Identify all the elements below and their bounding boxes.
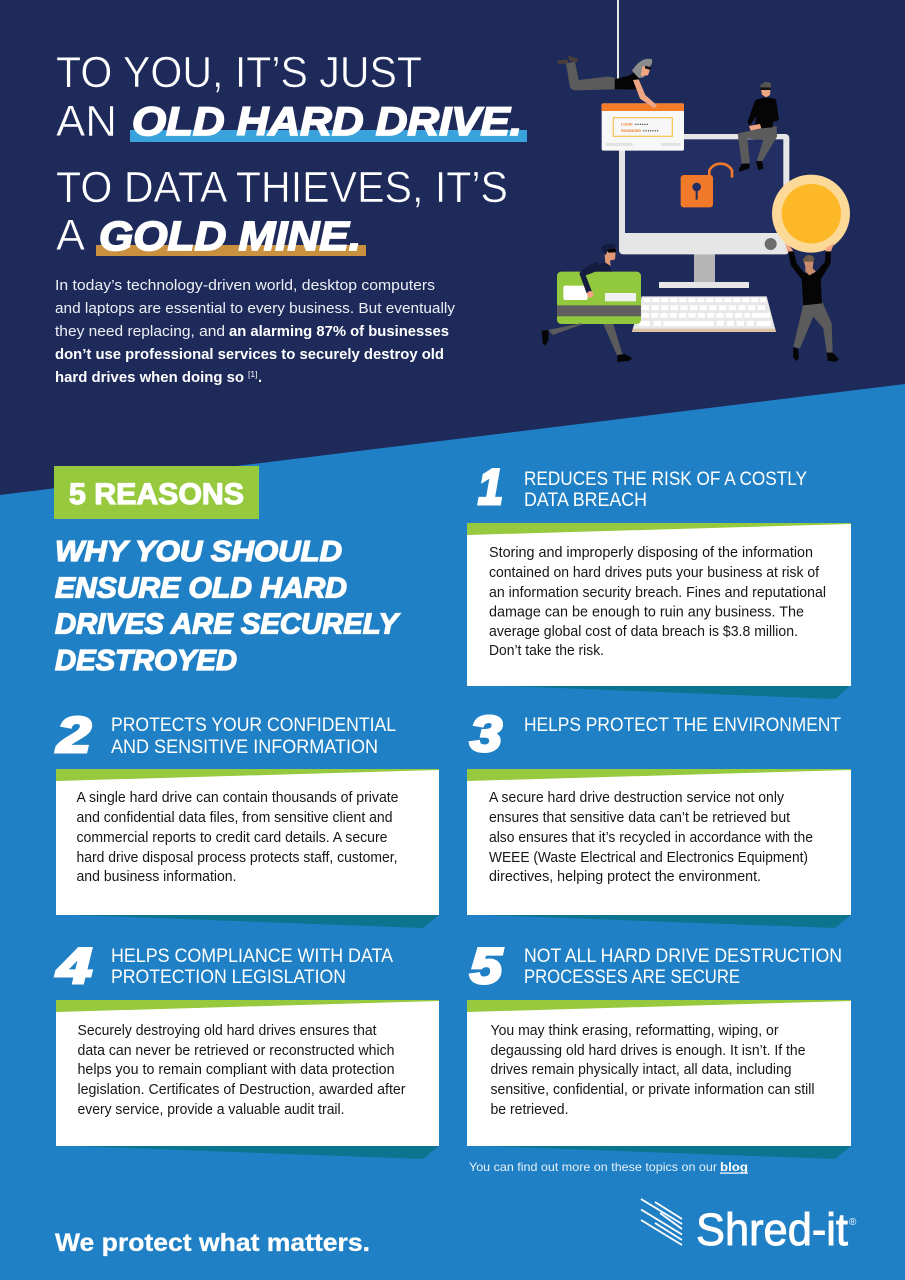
logo: Shred-it	[641, 1199, 857, 1255]
panel: reason 1: damage can be enough to ruin any business. The	[489, 604, 804, 620]
thief lifting coin	[785, 243, 839, 362]
panel: reason 1: average global cost of data breach is $3.8 million.	[489, 624, 798, 640]
badge: 5 reasons	[54, 466, 259, 519]
panel: reason 1: an information security breach. Fines and reputational	[489, 585, 826, 601]
intro paragraph: they need replacing, and	[55, 324, 225, 340]
gold coin	[772, 175, 850, 253]
intro paragraph: hard drives when doing so	[55, 370, 244, 386]
panel: reason 4: data can never be retrieved or reconstructed which	[78, 1043, 395, 1059]
panel: reason 3: ensures that sensitive data can’t be retrieved but	[489, 810, 790, 826]
panel: reason 1: contained on hard drives puts your business at risk of	[489, 565, 819, 581]
panel: reason 2: and confidential data files, from sensitive client and	[76, 810, 393, 826]
login window: ••••••	[635, 122, 649, 127]
tagline: We protect what matters.	[55, 1229, 370, 1257]
credit card	[557, 272, 641, 324]
keyboard	[632, 296, 776, 332]
title: A	[56, 211, 86, 260]
panel: reason 2: A single hard drive can contain thousands of private	[76, 790, 399, 806]
panel: reason 4: legislation. Certificates of Destruction, awarded after	[78, 1082, 406, 1098]
title: GOLD MINE.	[99, 213, 361, 259]
panel: reason 1	[467, 459, 851, 699]
subheading: why: DESTROYED	[55, 645, 237, 677]
panel: reason 3: also ensures that it’s recycled in accordance with the	[489, 830, 813, 846]
panel: reason 4: 4	[56, 938, 92, 994]
panel: reason 3: directives, helping protect the environment.	[489, 869, 761, 885]
badge: 5 reasons: 5 REASONS	[69, 478, 244, 511]
panel: reason 5: NOT ALL HARD DRIVE DESTRUCTION	[524, 945, 842, 967]
panel: reason 4: Securely destroying old hard drives ensures that	[78, 1023, 377, 1039]
subheading: why: ENSURE OLD HARD	[55, 572, 347, 604]
panel: reason 5: be retrieved.	[490, 1102, 568, 1118]
panel: reason 1: Don’t take the risk.	[489, 643, 604, 659]
panel: reason 1: REDUCES THE RISK OF A COSTLY	[524, 468, 807, 490]
panel: reason 2: 2	[56, 707, 91, 763]
panel: reason 5: drives remain physically intact, all data, including	[490, 1062, 792, 1078]
intro paragraph: In today’s technology-driven world, desktop computers	[55, 278, 435, 294]
panel: reason 2	[56, 707, 439, 928]
panel: reason 4: PROTECTION LEGISLATION	[111, 966, 346, 988]
computer monitor	[619, 134, 789, 288]
thief running with card	[542, 244, 633, 362]
logo: Shred-it: Shred-it	[696, 1204, 848, 1255]
panel: reason 4: HELPS COMPLIANCE WITH DATA	[111, 945, 393, 967]
panel: reason 4	[56, 938, 439, 1159]
login window: PASSWORD	[621, 129, 641, 133]
panel: reason 2: PROTECTS YOUR CONFIDENTIAL	[111, 714, 396, 736]
intro paragraph: .	[258, 370, 262, 386]
login window: •••••••	[643, 128, 659, 133]
blue diagonal lower background	[0, 384, 905, 1280]
intro paragraph: [1]	[248, 369, 257, 379]
intro paragraph: and laptops are essential to every business. But eventually	[55, 301, 456, 317]
panel: reason 3: A secure hard drive destruction service not only	[489, 790, 785, 806]
intro paragraph	[55, 278, 456, 386]
subheading: why	[55, 536, 401, 677]
login window: LOGIN	[621, 123, 633, 127]
panel: reason 2: hard drive disposal process protects staff, customer,	[76, 850, 398, 866]
blog note: You can find out more on these topics on our	[469, 1160, 717, 1174]
blog note: blog	[720, 1160, 748, 1174]
panel: reason 5: sensitive, confidential, or private information can still	[490, 1082, 814, 1098]
logo: Shred-it: ®	[849, 1217, 857, 1228]
panel: reason 2: AND SENSITIVE INFORMATION	[111, 736, 378, 758]
panel: reason 3: WEEE (Waste Electrical and Electronics Equipment)	[489, 850, 808, 866]
rope	[617, 0, 619, 89]
panel: reason 1: DATA BREACH	[524, 489, 647, 511]
intro paragraph: don’t use professional services to securely destroy old	[55, 347, 444, 363]
thief hanging on rope	[557, 55, 657, 108]
login window	[602, 103, 684, 151]
panel: reason 5	[467, 938, 851, 1159]
panel: reason 1: Storing and improperly disposing of the information	[489, 545, 813, 561]
panel: reason 2: and business information.	[76, 869, 236, 885]
title: TO DATA THIEVES, IT’S	[56, 163, 508, 212]
panel: reason 5: degaussing old hard drives is enough. It isn’t. If the	[490, 1043, 806, 1059]
title: OLD HARD DRIVE.	[132, 100, 522, 144]
panel: reason 3	[467, 706, 851, 928]
thief sitting on monitor	[738, 82, 779, 172]
panel: reason 2: commercial reports to credit card details. A secure	[76, 830, 388, 846]
subheading: why: DRIVES ARE SECURELY	[55, 608, 401, 640]
icon: open padlock	[681, 164, 732, 207]
panel: reason 4: every service, provide a valuable audit trail.	[78, 1102, 344, 1118]
title: TO YOU, IT’S JUST	[56, 48, 422, 97]
title: AN	[56, 97, 117, 146]
panel: reason 5: You may think erasing, reformatting, wiping, or	[490, 1023, 779, 1039]
panel: reason 1: 1	[478, 459, 503, 515]
title	[56, 48, 527, 260]
panel: reason 5: PROCESSES ARE SECURE	[524, 966, 740, 988]
panel: reason 3: HELPS PROTECT THE ENVIRONMENT	[524, 714, 841, 736]
illustration: data thieves attacking a computer	[542, 0, 850, 362]
panel: reason 4: helps you to remain compliant with data protection	[78, 1062, 395, 1078]
panel: reason 5: 5	[470, 938, 503, 994]
subheading: why: WHY YOU SHOULD	[55, 536, 342, 568]
intro paragraph: an alarming 87% of businesses	[229, 324, 449, 340]
panel: reason 3: 3	[470, 706, 502, 762]
